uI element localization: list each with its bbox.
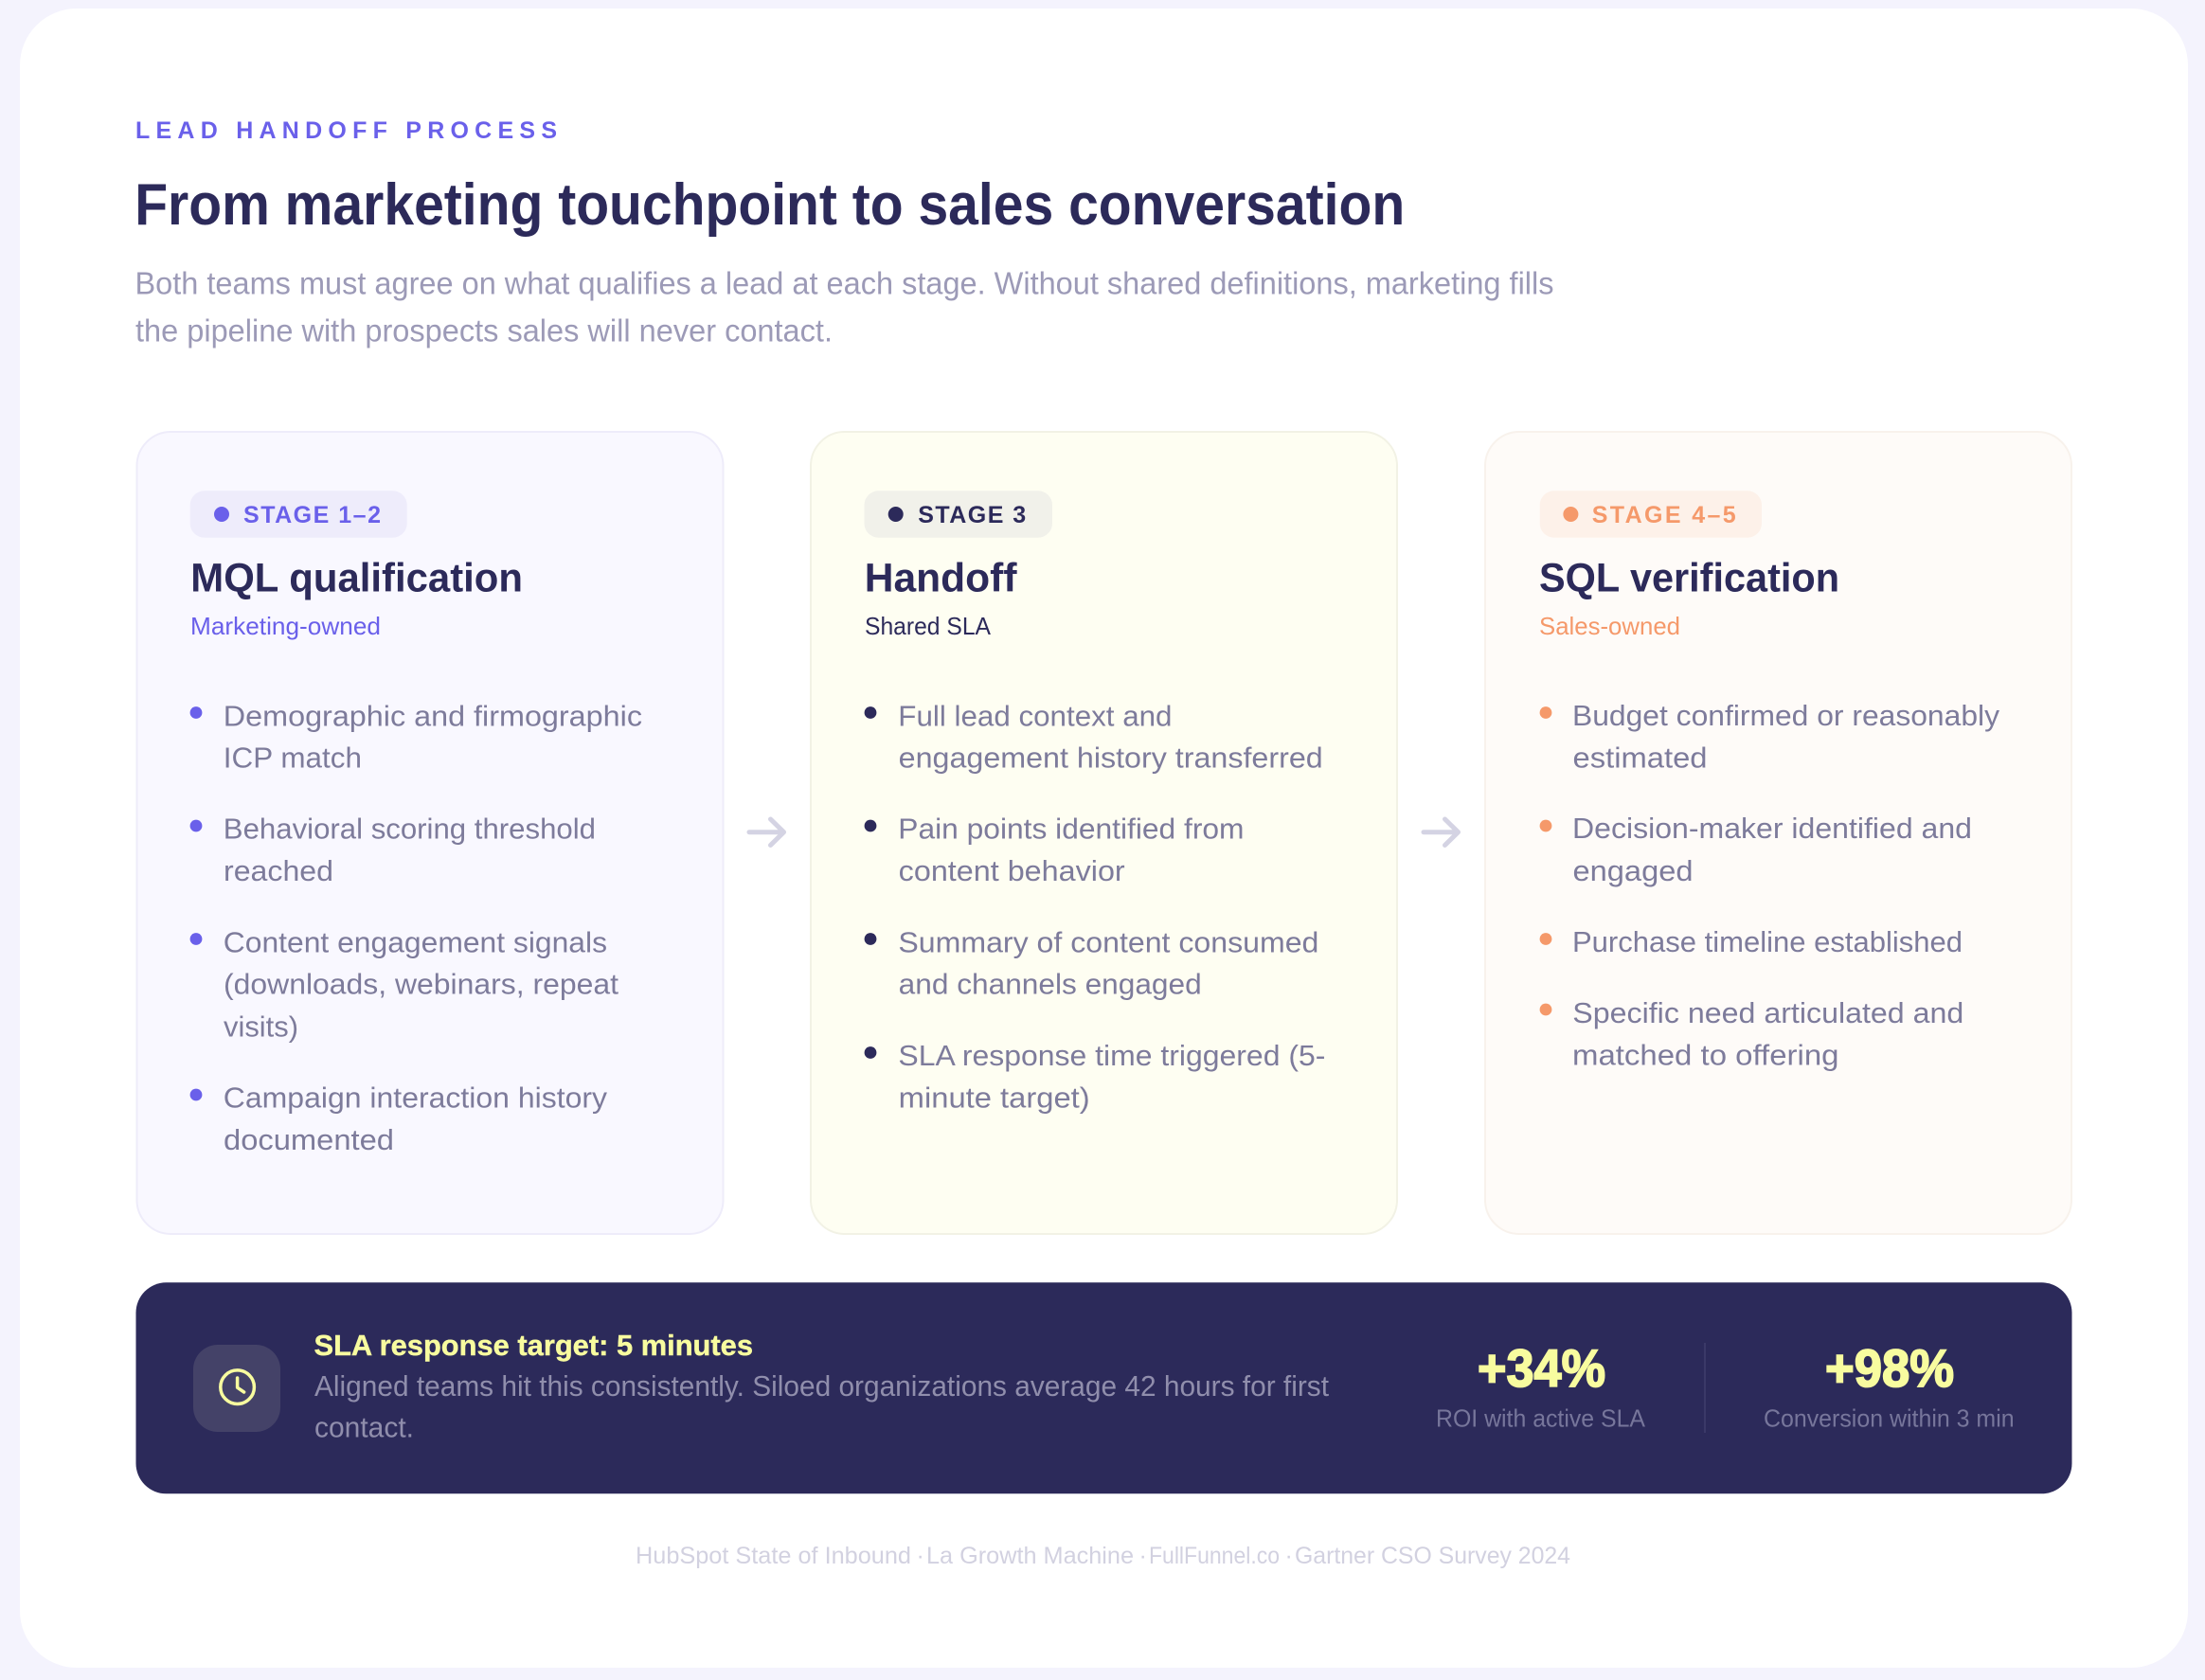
bullet list: ICP match xyxy=(224,741,362,775)
panel: SQL verification xyxy=(1485,432,2071,1234)
bullet list: matched to offering xyxy=(1572,1038,1839,1072)
card owner: Marketing-owned xyxy=(190,612,381,640)
bullet list: Campaign interaction history xyxy=(224,1081,608,1114)
bullet list xyxy=(865,699,1325,1114)
banner description xyxy=(314,1369,1329,1443)
stat: ROI xyxy=(1436,1338,1646,1433)
panel: Handoff xyxy=(811,432,1397,1234)
sources footer: FullFunnel.co xyxy=(1149,1543,1280,1569)
sources footer: Gartner CSO Survey 2024 xyxy=(1295,1543,1570,1569)
eyebrow label: LEAD HANDOFF PROCESS xyxy=(135,117,557,144)
arrow: stage 3 to stage 4-5 xyxy=(1424,819,1459,845)
card owner: Sales-owned xyxy=(1539,612,1680,640)
bullet list: engagement history transferred xyxy=(899,741,1323,775)
card heading: Handoff xyxy=(865,555,1017,600)
bullet list: Demographic and firmographic xyxy=(224,699,642,732)
title: From marketing touchpoint to sales conversation xyxy=(134,172,1405,238)
card heading: SQL verification xyxy=(1539,555,1839,600)
bullet list xyxy=(190,699,642,1156)
bullet list: content behavior xyxy=(899,854,1125,887)
bullet list: Purchase timeline established xyxy=(1572,925,1963,958)
sources footer: La Growth Machine xyxy=(926,1543,1134,1569)
subtitle xyxy=(134,265,1553,349)
bullet list: Specific need articulated and xyxy=(1572,996,1963,1029)
subtitle: the pipeline with prospects sales will never contact. xyxy=(135,313,833,349)
bullet list: SLA response time triggered (5- xyxy=(898,1039,1325,1072)
stat: conversion: Conversion within 3 min xyxy=(1764,1404,2015,1433)
arrow: stage 1-2 to stage 3 xyxy=(749,819,784,845)
bullet list: and channels engaged xyxy=(899,968,1202,1000)
card heading: MQL qualification xyxy=(190,555,523,600)
sources footer xyxy=(636,1543,1570,1569)
badge: stage 3: STAGE 3 xyxy=(918,502,1026,528)
bullet list: Pain points identified from xyxy=(898,812,1245,845)
badge: stage 1-2: STAGE 1–2 xyxy=(243,502,381,528)
banner description: Aligned teams hit this consistently. Siloed organizations average 42 hours for first xyxy=(314,1369,1329,1403)
stat: ROI: ROI with active SLA xyxy=(1436,1404,1646,1433)
bullet list: estimated xyxy=(1572,741,1707,775)
bullet list: Budget confirmed or reasonably xyxy=(1572,699,2000,732)
badge: stage 4-5: STAGE 4–5 xyxy=(1592,502,1736,528)
panel: MQL qualification xyxy=(136,432,724,1234)
banner description: contact. xyxy=(314,1411,414,1443)
bullet list: documented xyxy=(224,1123,394,1156)
stat: conversion xyxy=(1764,1338,2015,1433)
subtitle: Both teams must agree on what qualifies a lead at each stage. Without shared definitions, marketing fills xyxy=(134,265,1553,301)
bullet list: visits) xyxy=(224,1010,298,1044)
sources footer: · xyxy=(917,1543,924,1569)
stat divider xyxy=(1704,1343,1706,1433)
bullet list: Summary of content consumed xyxy=(898,925,1318,958)
bullet list: Content engagement signals xyxy=(224,925,607,958)
stat: conversion: +98% xyxy=(1825,1338,1954,1398)
sources footer: · xyxy=(1138,1543,1147,1569)
icon: clock xyxy=(193,1345,280,1432)
badge: stage 4-5 xyxy=(1540,491,1762,538)
card owner: Shared SLA xyxy=(865,612,992,640)
bullet list: reached xyxy=(224,854,333,887)
stat: ROI: +34% xyxy=(1478,1338,1605,1398)
bullet list: Full lead context and xyxy=(898,699,1173,732)
badge: stage 1-2 xyxy=(190,491,407,538)
sources footer: HubSpot State of Inbound xyxy=(636,1543,911,1569)
banner: SLA response target xyxy=(136,1282,2072,1493)
bullet list xyxy=(1540,699,2000,1072)
bullet list: (downloads, webinars, repeat xyxy=(224,968,618,1000)
bullet list: Decision-maker identified and xyxy=(1572,812,1972,845)
banner heading: SLA response target: 5 minutes xyxy=(314,1329,753,1362)
bullet list: engaged xyxy=(1572,854,1694,887)
bullet list: Behavioral scoring threshold xyxy=(224,812,596,845)
badge: stage 3 xyxy=(864,491,1052,538)
bullet list: minute target) xyxy=(899,1081,1090,1114)
sources footer: · xyxy=(1284,1543,1293,1569)
